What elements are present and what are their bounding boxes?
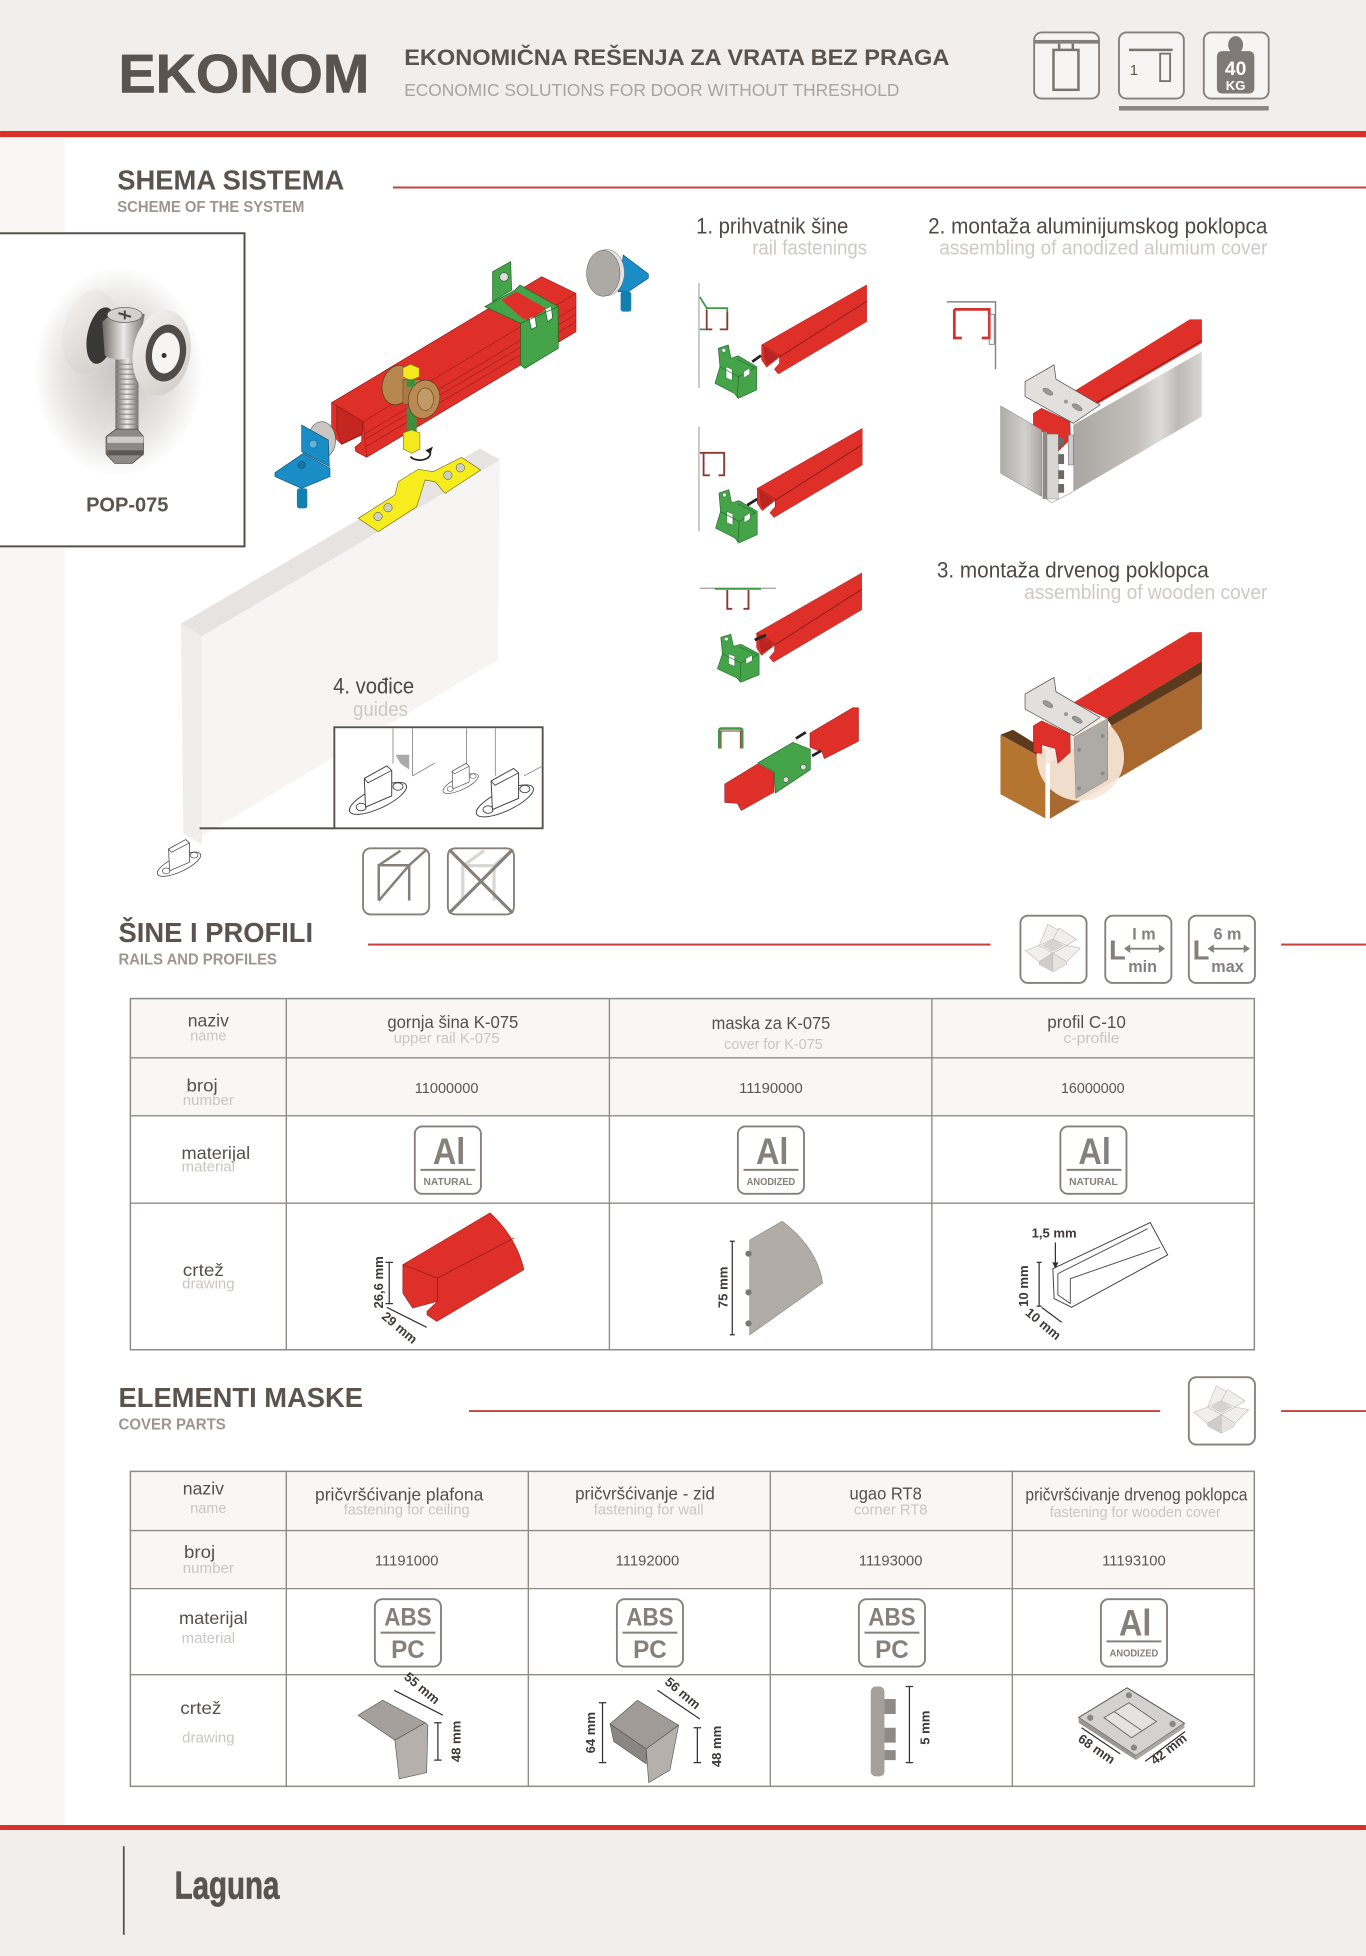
icon: maximum length 6 m <box>1189 916 1255 983</box>
row: name: profil C-10 <box>1047 1012 1126 1032</box>
drawing: wall fastening: 64 mm <box>583 1712 598 1753</box>
heading: rails and profiles <box>119 917 1366 968</box>
row: drawing: drawing <box>182 1731 235 1747</box>
heading: cover parts: ELEMENTI MASKE <box>119 1382 363 1413</box>
row: name: pričvršćivanje plafona <box>315 1485 484 1505</box>
row: number: number <box>183 1093 234 1109</box>
badge: Al natural: NATURAL <box>1069 1177 1118 1188</box>
row: name: naziv <box>188 1011 229 1031</box>
badge: ABS PC: ABS <box>384 1603 432 1631</box>
badge: ABS PC: PC <box>633 1636 667 1664</box>
diagram: wall fastening 2 <box>699 427 862 543</box>
row: number: 11193000 <box>859 1554 923 1570</box>
badge: ABS PC: PC <box>391 1636 425 1664</box>
badge: Al natural: Al <box>1078 1130 1111 1172</box>
row: name: fastening for wall <box>594 1502 704 1518</box>
row: material <box>182 1126 1126 1194</box>
heading: rails and profiles: ŠINE I PROFILI <box>119 917 313 948</box>
drawing: corner RT8 <box>871 1687 932 1776</box>
drawing: cover for rail: 75 mm <box>715 1267 730 1308</box>
row: number: number <box>183 1561 234 1577</box>
drawing: c-profile: 10 mm <box>1023 1305 1064 1343</box>
icon: maximum length 6 m: 6 m <box>1214 925 1241 943</box>
row: material <box>179 1599 1167 1667</box>
yellow plate <box>358 457 481 532</box>
green bracket <box>485 262 558 368</box>
drawing: ceiling fastening: 55 mm <box>401 1669 443 1707</box>
badge: Al anodized: Al <box>756 1130 788 1172</box>
row: name <box>183 1478 1248 1521</box>
row: number: 16000000 <box>1061 1081 1125 1097</box>
row: name: pričvršćivanje - zid <box>575 1483 715 1503</box>
drawing: ceiling fastening: 48 mm <box>448 1721 463 1762</box>
icon: maximum length 6 m: L <box>1193 934 1209 965</box>
drawing: upper rail: 29 mm <box>379 1309 420 1347</box>
row: name: ugao RT8 <box>850 1483 922 1503</box>
icon: maximum length 6 m: max <box>1211 958 1244 976</box>
subtitle Serbian: EKONOMIČNA REŠENJA ZA VRATA BEZ PRAGA <box>404 45 949 70</box>
label: guides <box>333 674 414 721</box>
heading: wooden cover: assembling of wooden cover <box>1024 582 1268 604</box>
heading: anodized cover <box>928 213 1268 259</box>
diagram: ceiling fastening <box>700 573 862 682</box>
badge: Al anodized: Al <box>1119 1601 1151 1643</box>
row: name <box>188 1011 1126 1053</box>
brown roller with yellow bolts <box>378 362 444 460</box>
icon: corner not allowed <box>448 848 514 914</box>
icon: 40 kg weight: KG <box>1226 78 1245 93</box>
row: name: fastening for ceiling <box>344 1502 470 1518</box>
badge: Al natural: NATURAL <box>424 1177 472 1188</box>
row: material: material <box>182 1631 235 1647</box>
badge: ABS PC <box>617 1599 683 1667</box>
label: guides: guides <box>353 699 408 721</box>
badge: Al anodized <box>738 1126 804 1194</box>
icon: minimum length 1 m <box>1105 916 1171 983</box>
row: name: gornja šina K-075 <box>387 1012 518 1032</box>
drawing: wall fastening: 56 mm <box>662 1674 703 1712</box>
badge: Al anodized <box>1101 1599 1167 1667</box>
icon: corner allowed <box>363 848 429 914</box>
icon: package <box>1020 916 1087 983</box>
row: name: name <box>190 1501 226 1517</box>
row: drawing: drawing <box>182 1277 235 1293</box>
row: name: name <box>190 1028 226 1044</box>
badge: Al anodized: ANODIZED <box>1110 1649 1158 1660</box>
row: number: broj <box>184 1542 215 1562</box>
heading: wooden cover <box>937 558 1268 604</box>
diagram: aluminium cover assembly <box>947 302 1202 503</box>
row: name: corner RT8 <box>854 1502 928 1518</box>
label: guides: 4. vođice <box>333 674 414 699</box>
drawing: c-profile: 10 mm <box>1016 1265 1031 1307</box>
hanging system: rail and roller <box>275 249 648 532</box>
subtitle English: ECONOMIC SOLUTIONS FOR DOOR WITHOUT THRESHOLD <box>404 80 899 100</box>
left blue bracket <box>275 422 336 508</box>
row: name: pričvršćivanje drvenog poklopca <box>1025 1485 1248 1505</box>
footer band <box>0 1825 1366 1956</box>
diagram: wall fastening 1 <box>699 283 867 398</box>
diagram: wooden cover assembly <box>1000 632 1202 819</box>
row: number: 11192000 <box>616 1554 679 1570</box>
heading: scheme of the system: SCHEME OF THE SYSTEM <box>117 199 304 216</box>
row: number: 11193100 <box>1102 1554 1166 1570</box>
drawing: upper rail: 26,6 mm <box>371 1256 386 1309</box>
badge: Al natural <box>415 1126 481 1194</box>
icon: minimum length 1 m: L <box>1109 934 1126 965</box>
drawing: wooden cover fastening <box>1075 1688 1190 1768</box>
heading: cover parts: COVER PARTS <box>119 1417 226 1434</box>
icon: door on rail <box>1034 32 1099 99</box>
badge: ABS PC: ABS <box>626 1603 674 1631</box>
row: material: materijal <box>179 1608 248 1628</box>
title: EKONOM <box>119 42 369 104</box>
row: drawing: crtež <box>183 1260 224 1280</box>
heading: cover parts <box>119 1382 1366 1434</box>
heading: anodized cover: assembling of anodized alumium cover <box>939 237 1268 259</box>
heading: anodized cover: 2. montaža aluminijumskog poklopca <box>928 213 1268 238</box>
drawing: c-profile <box>1016 1222 1168 1343</box>
row: material: material <box>182 1159 235 1175</box>
row: number: 11000000 <box>415 1081 478 1097</box>
logo: Laguna: Laguna <box>175 1865 280 1908</box>
heading: rail fastenings: 1. prihvatnik šine <box>696 213 848 238</box>
row: drawing <box>182 1260 235 1293</box>
door <box>181 448 500 845</box>
label: POP-075: POP-075 <box>86 494 168 516</box>
drawing: upper rail <box>371 1213 524 1347</box>
right blue bracket with disk <box>587 249 648 312</box>
row: drawing <box>180 1698 235 1747</box>
drawing: corner RT8: 5 mm <box>917 1711 932 1745</box>
heading: rails and profiles: RAILS AND PROFILES <box>119 951 277 968</box>
row: name: cover for K-075 <box>724 1037 823 1053</box>
header band <box>0 0 1366 137</box>
heading: rail fastenings <box>696 213 867 259</box>
row: name: c-profile <box>1063 1031 1120 1047</box>
panel: guides detail <box>200 727 543 829</box>
badge: Al anodized: ANODIZED <box>747 1177 795 1188</box>
icon: 40 kg weight <box>1204 32 1269 99</box>
drawing: wooden cover fastening: 68 mm <box>1075 1731 1118 1767</box>
row: name: maska za K-075 <box>712 1013 830 1033</box>
red rail <box>332 277 576 457</box>
heading: scheme of the system: SHEMA SISTEMA <box>117 165 344 196</box>
heading: wooden cover: 3. montaža drvenog poklopca <box>937 558 1210 583</box>
drawing: c-profile: 1,5 mm <box>1032 1225 1077 1240</box>
row: number: 11191000 <box>375 1554 439 1570</box>
icon: one door: 1 <box>1130 62 1138 79</box>
row: drawing: crtež <box>180 1698 221 1718</box>
badge: ABS PC: ABS <box>868 1603 916 1631</box>
drawing: cover for rail <box>715 1221 823 1335</box>
row: number <box>183 1076 1125 1109</box>
icon: minimum length 1 m: min <box>1128 958 1157 976</box>
table: rails and profiles <box>130 998 1255 1350</box>
icon: small floor guide <box>154 840 204 881</box>
icon: one door <box>1119 32 1184 99</box>
drawing: ceiling fastening <box>358 1669 463 1779</box>
icon: package <box>1189 1377 1255 1445</box>
drawing: wall fastening <box>583 1674 724 1783</box>
drawing: wooden cover fastening: 42 mm <box>1148 1730 1190 1768</box>
row: name: upper rail K-075 <box>394 1031 500 1047</box>
heading: scheme of the system <box>117 165 1366 216</box>
heading: rail fastenings: rail fastenings <box>752 237 867 259</box>
drawing: wall fastening: 48 mm <box>709 1726 724 1767</box>
panel: POP-075 roller photo <box>0 233 245 546</box>
row: material: materijal <box>182 1143 250 1163</box>
badge: ABS PC <box>859 1599 925 1667</box>
row: number: 11190000 <box>739 1081 803 1097</box>
row: name: naziv <box>183 1478 224 1498</box>
row: name: fastening for wooden cover <box>1050 1505 1221 1521</box>
table: cover parts <box>130 1471 1255 1786</box>
row: number <box>183 1542 1166 1577</box>
diagram: rail connector <box>719 708 859 811</box>
badge: Al natural <box>1060 1126 1126 1194</box>
icon: 40 kg weight: 40 <box>1225 59 1246 80</box>
badge: ABS PC: PC <box>875 1636 909 1664</box>
row: number: broj <box>187 1076 218 1096</box>
icon: minimum length 1 m: I m <box>1132 925 1156 943</box>
badge: ABS PC <box>375 1599 441 1667</box>
badge: Al natural: Al <box>433 1130 465 1172</box>
